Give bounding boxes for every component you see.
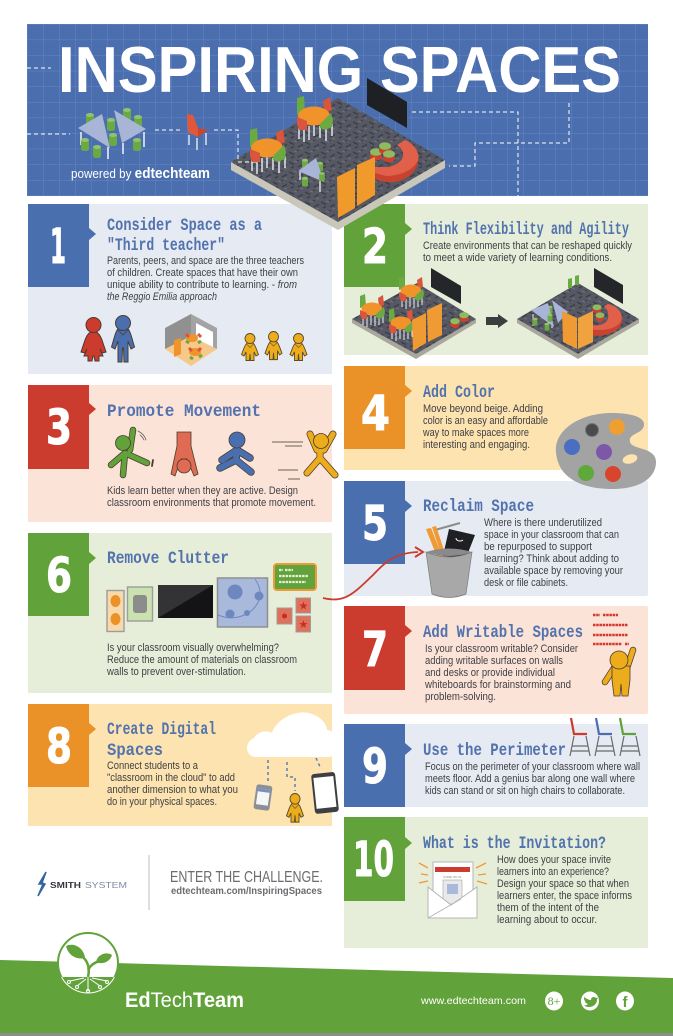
panel 7: add writable spaces xyxy=(344,606,648,714)
body text: kids can stand or sit on high chairs to collaborate. xyxy=(425,785,625,797)
icon: red star cards xyxy=(277,598,310,632)
heading xyxy=(107,216,262,256)
body text: walls to prevent over-stimulation. xyxy=(106,666,246,678)
number badge 1 xyxy=(28,204,96,287)
icon: Facebook: f xyxy=(622,994,628,1011)
heading: What is the Invitation? xyxy=(423,834,606,854)
footer brand name: EdTechTeam xyxy=(125,989,244,1012)
heading: Reclaim Space xyxy=(423,497,534,517)
body text xyxy=(423,240,633,264)
body text: be repurposed to support xyxy=(484,541,592,553)
body text: "classroom in the cloud" to add xyxy=(107,772,235,784)
panel 5: reclaim space xyxy=(344,481,648,598)
body text: learners enter, the space informs xyxy=(497,890,633,902)
body text: Connect students to a xyxy=(107,760,198,772)
panel 3: promote movement xyxy=(28,385,335,522)
panel 9: use the perimeter xyxy=(344,718,648,807)
illustration: room layout after xyxy=(517,268,639,359)
number badge 8 xyxy=(28,704,96,787)
icon: green child kicking xyxy=(111,430,153,475)
body text: Reduce the amount of materials on classroom xyxy=(107,654,297,666)
body text: Focus on the perimeter of your classroom where wall xyxy=(425,761,640,773)
title: INSPIRING SPACES xyxy=(58,33,621,106)
heading: Consider Space as a xyxy=(107,216,262,236)
icon: classroom cutaway xyxy=(165,314,217,366)
icon: trash can with ruler and tablet xyxy=(426,523,475,598)
body text: learning? Think about adding to xyxy=(484,553,619,565)
icon: three yellow children xyxy=(242,332,307,360)
number badge 8: 8 xyxy=(46,719,72,775)
body text: Move beyond beige. Adding xyxy=(423,403,543,415)
body text: Parents, peers, and space are the three teachers xyxy=(107,255,304,267)
footer website: www.edtechteam.com xyxy=(420,995,526,1007)
body text: meets floor. Add a genius bar along one wall where xyxy=(425,773,635,785)
body text xyxy=(107,255,304,303)
heading: Promote Movement xyxy=(107,402,261,422)
icon: red chair xyxy=(187,114,208,150)
number badge 9: 9 xyxy=(362,739,388,795)
body text: learners into an experience? xyxy=(497,866,609,878)
body text: Where is there underutilized xyxy=(484,517,602,529)
illustration: main isometric classroom xyxy=(231,78,445,230)
icon: chalkboard xyxy=(274,564,316,590)
body text xyxy=(497,854,633,926)
body text: space in your classroom that can xyxy=(484,529,619,541)
body text: Kids learn better when they are active. Design xyxy=(107,485,298,497)
body text: Create environments that can be reshaped quickly xyxy=(423,240,633,252)
number badge 2 xyxy=(344,204,412,287)
panel 4: add color xyxy=(344,366,648,470)
icon: red writing lines xyxy=(593,615,629,644)
number badge 7: 7 xyxy=(362,622,388,678)
panel 8: create digital spaces xyxy=(28,704,339,826)
icon: paint palette xyxy=(556,413,656,489)
body text xyxy=(107,760,238,808)
icon: Facebook xyxy=(616,992,634,1011)
number badge 1: 1 xyxy=(50,219,66,275)
heading: Add Writable Spaces xyxy=(423,623,583,643)
header banner xyxy=(27,24,648,196)
body text xyxy=(107,485,316,509)
number badge 5 xyxy=(344,481,412,564)
icon: blue map poster xyxy=(218,578,268,627)
number badge 10 xyxy=(344,817,412,901)
icon: triangle tables with stools xyxy=(78,108,146,159)
icon: motion lines xyxy=(272,442,303,479)
icon: red adult xyxy=(81,318,106,361)
panel 6: remove clutter xyxy=(28,533,332,693)
icon: small phone xyxy=(253,784,273,811)
heading: Use the Perimeter xyxy=(423,741,566,761)
icon: yellow child jumping xyxy=(307,434,335,475)
sponsor logo: Smith System xyxy=(38,872,127,896)
icon: yellow child xyxy=(286,794,304,822)
number badge 2: 2 xyxy=(362,219,388,275)
body text: them of the intent of the xyxy=(497,902,599,914)
number badge 7 xyxy=(344,606,412,690)
body text: color is an easy and affordable xyxy=(423,415,548,427)
call to action: edtechteam.com/InspiringSpaces xyxy=(171,885,322,897)
body text: of children. Create spaces that have their own xyxy=(107,267,298,279)
body text: to meet a wide variety of learning conditions. xyxy=(423,252,612,264)
heading: Create Digital xyxy=(107,720,216,740)
arrow xyxy=(486,314,508,328)
number badge 9 xyxy=(344,724,412,807)
sponsor logo: Smith System: SMITH xyxy=(50,881,81,890)
body text: learning about to occur. xyxy=(497,914,597,926)
heading: Add Color xyxy=(423,383,495,403)
body text: problem-solving. xyxy=(425,691,496,703)
icon: blue child running xyxy=(220,432,251,472)
panel 10: what is the invitation xyxy=(344,817,648,948)
icon: red star cards: ★ xyxy=(298,618,308,631)
number badge 4 xyxy=(344,366,412,449)
icon: cloud xyxy=(247,712,337,757)
footer band xyxy=(0,960,673,1036)
powered by edtechteam: powered by edtechteam xyxy=(71,166,210,182)
call to action: ENTER THE CHALLENGE. xyxy=(170,869,323,886)
heading: "Third teacher" xyxy=(107,236,225,256)
body text: way to make spaces more xyxy=(422,427,529,439)
icon: Google Plus xyxy=(545,992,563,1010)
panel 2: think flexibility xyxy=(344,204,648,359)
body text: adding writable surfaces on walls xyxy=(425,655,564,667)
body text: do in your physical spaces. xyxy=(107,796,217,808)
number badge 6 xyxy=(28,533,96,616)
body text: classroom environments that promote movement. xyxy=(107,497,316,509)
number badge 3: 3 xyxy=(46,400,72,456)
heading: Remove Clutter xyxy=(107,549,229,569)
number badge 4: 4 xyxy=(361,386,390,442)
body text: the Reggio Emilia approach xyxy=(107,291,217,303)
body text: desk or file cabinets. xyxy=(484,577,568,589)
body text: another dimension to what you xyxy=(107,784,238,796)
icon: Google Plus: 8+ xyxy=(548,994,561,1008)
icon: red star cards: ★ xyxy=(298,600,308,612)
body text: How does your space invite xyxy=(497,854,611,866)
icon: invitation envelope xyxy=(419,862,487,918)
icon: large phone xyxy=(311,772,339,814)
call to action xyxy=(170,869,323,897)
heading xyxy=(107,720,216,761)
icon: invitation envelope: COME ON IN. xyxy=(443,875,462,879)
icon: black screen xyxy=(158,585,213,618)
sponsor logo: Smith System: SYSTEM xyxy=(85,881,127,890)
icon: red child upside down xyxy=(171,432,198,476)
body text xyxy=(424,643,578,703)
body text: Is your classroom visually overwhelming? xyxy=(107,642,279,654)
icon: high chairs xyxy=(570,718,640,756)
body text xyxy=(106,642,297,678)
body text: interesting and engaging. xyxy=(423,439,530,451)
body text xyxy=(484,517,623,589)
body text: Is your classroom writable? Consider xyxy=(425,643,578,655)
number badge 5: 5 xyxy=(362,496,388,552)
footer logo: seedling xyxy=(58,933,118,993)
icon: dashed connections xyxy=(268,758,321,791)
icon: orange card xyxy=(107,590,124,632)
body text: and desks or provide individual xyxy=(425,667,555,679)
icon: blue adult xyxy=(112,316,134,362)
body text xyxy=(425,761,640,797)
icon: yellow child writing xyxy=(605,650,633,696)
panel 1: consider space xyxy=(28,204,332,374)
icon: Twitter xyxy=(581,992,599,1010)
body text: unique ability to contribute to learning. - from xyxy=(107,279,297,291)
illustration: room layout before xyxy=(352,268,476,359)
arrow: curved red connector xyxy=(323,547,423,600)
body text xyxy=(422,403,548,451)
icon: green card xyxy=(128,587,152,621)
body text: Design your space so that when xyxy=(497,878,629,890)
number badge 6: 6 xyxy=(46,548,72,604)
number badge 10: 10 xyxy=(353,832,394,888)
number badge 3 xyxy=(28,385,96,469)
body text: whiteboards for brainstorming and xyxy=(424,679,571,691)
body text: available space by removing your xyxy=(484,565,623,577)
heading: Spaces xyxy=(107,741,163,761)
